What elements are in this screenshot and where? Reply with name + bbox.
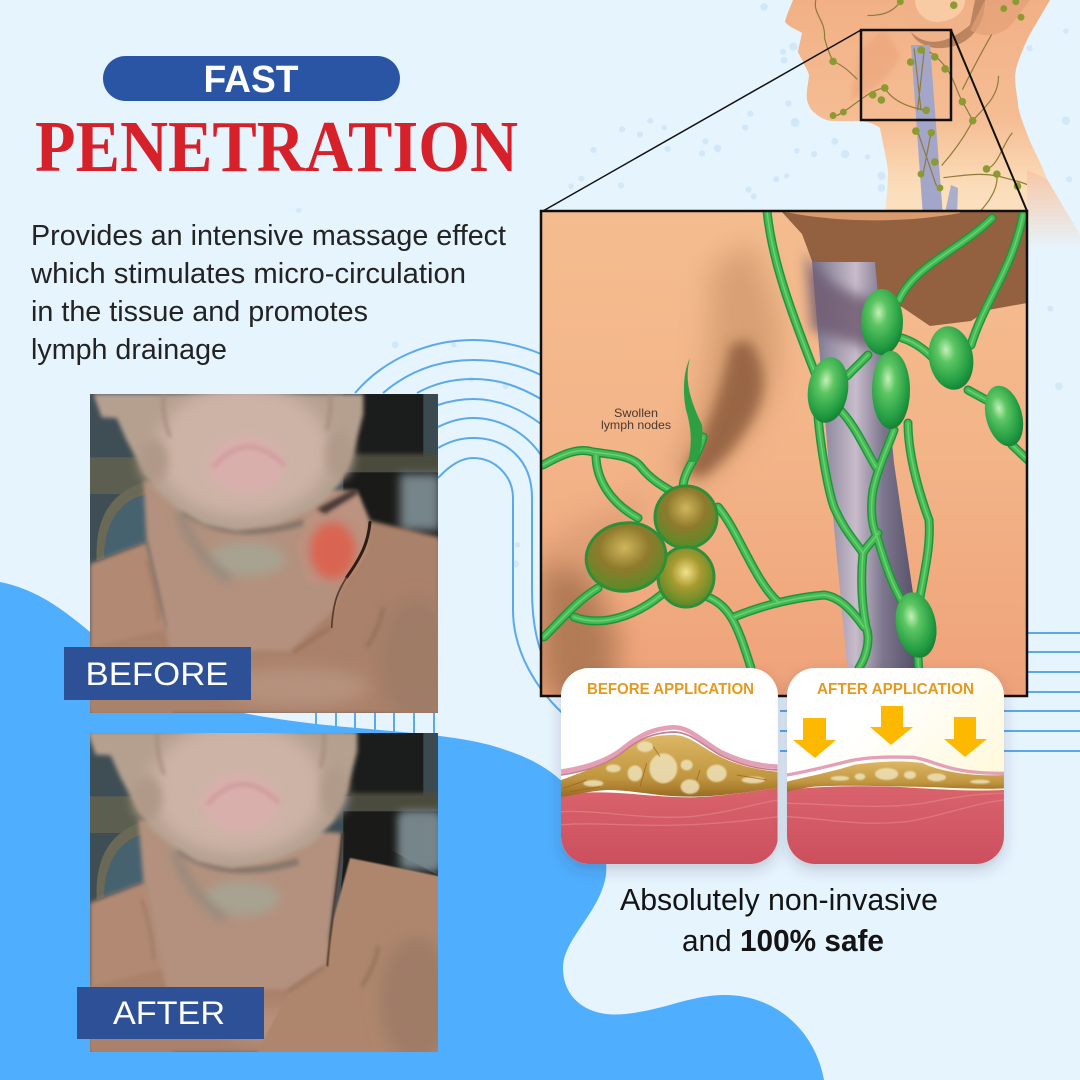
label: BEFORE: BEFORE — [86, 656, 228, 692]
illustration: head and neck with lymph vessels — [785, 0, 1080, 250]
small lymph vessels — [814, 0, 1027, 210]
label: Swollen lymph nodes: lymph nodes — [601, 418, 671, 432]
label: Swollen lymph nodes: Swollen — [614, 406, 658, 420]
skin line — [561, 727, 778, 772]
panel: before application card — [561, 668, 778, 864]
label: AFTER: AFTER — [113, 995, 225, 1031]
trachea — [812, 262, 914, 668]
description text: Provides an intensive massage effect — [31, 220, 506, 252]
label: AFTER — [77, 987, 264, 1039]
jaw shadow — [781, 211, 1027, 326]
green vessels — [543, 211, 1030, 690]
shoulder fade — [1027, 170, 1080, 250]
small lymph nodes — [829, 0, 1024, 191]
red tissue — [787, 786, 1004, 864]
background specks — [296, 3, 1072, 568]
description text: which stimulates micro-circulation — [30, 258, 466, 290]
fat layer — [787, 762, 1004, 792]
blue wave background blob — [0, 582, 824, 1080]
icon: yellow down arrows — [793, 706, 987, 758]
green lymph nodes — [804, 289, 1029, 661]
fat layer — [561, 735, 778, 797]
caption: non-invasive and safe — [620, 882, 938, 958]
title: PENETRATION: PENETRATION — [35, 106, 518, 187]
decorative concentric blue lines — [316, 340, 1080, 751]
card heading: BEFORE APPLICATION — [587, 681, 754, 698]
description text: in the tissue and promotes — [31, 296, 368, 328]
swelling: red neck lump — [297, 489, 370, 627]
skin line — [787, 757, 1004, 775]
panel: enlarged lymph nodes illustration — [541, 211, 1030, 696]
title pill: FAST — [103, 56, 400, 101]
card heading: AFTER APPLICATION — [817, 681, 974, 698]
label: Swollen lymph nodes — [601, 406, 671, 432]
zoom callout box and lines — [543, 30, 1027, 211]
caption: non-invasive and safe: and 100% safe — [682, 923, 884, 958]
label: BEFORE — [64, 647, 251, 700]
panel: after application card — [787, 668, 1004, 864]
title pill: FAST: FAST — [204, 59, 298, 101]
swollen gold lymph nodes — [581, 486, 717, 607]
vessel tip above swollen nodes — [684, 358, 703, 462]
description text: lymph drainage — [31, 334, 227, 366]
description text — [30, 220, 506, 366]
caption: non-invasive and safe: Absolutely non-invasive — [620, 882, 938, 917]
neck crease — [327, 833, 342, 966]
red tissue — [561, 788, 778, 864]
photo: before — [90, 386, 453, 724]
photo: after — [90, 733, 438, 1052]
soft neck shadow — [670, 240, 779, 490]
